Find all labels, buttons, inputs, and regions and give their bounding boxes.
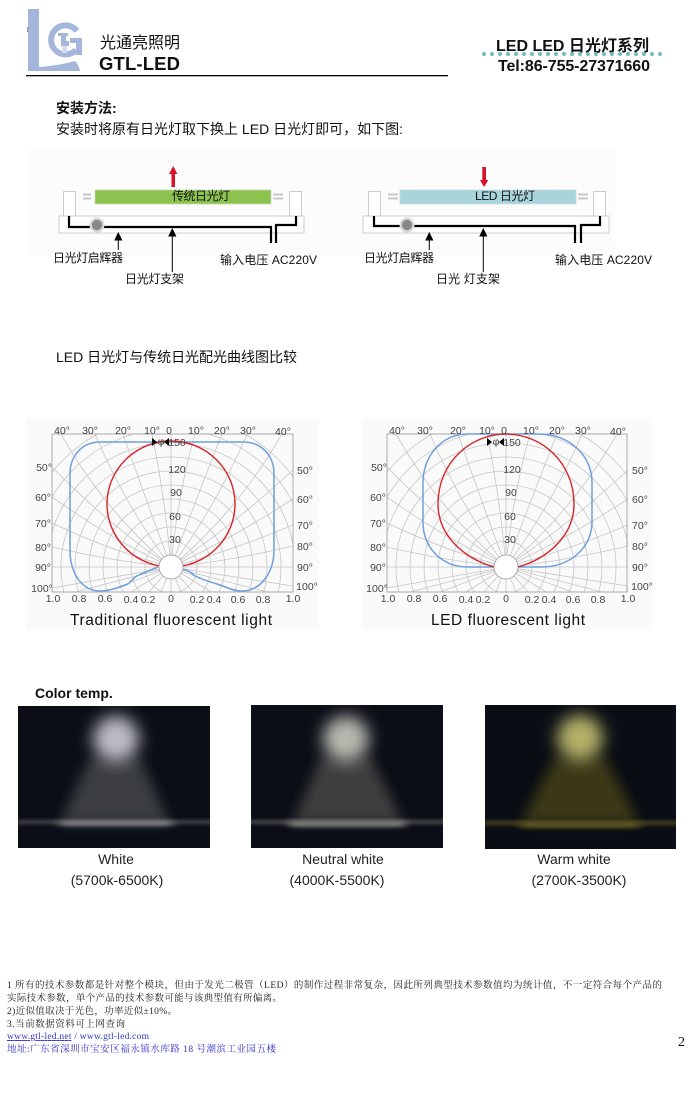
caption: white: [71, 851, 163, 888]
axis labels: 70°: [632, 520, 648, 532]
axis labels: 0: [503, 593, 509, 605]
note 1: 1 所有的技术参数都是针对整个模块，但由于发光二极管（LED）的制作过程非常复杂，因此所列典型技术参数值均为统计值，不一定符合每个产品的: [7, 979, 662, 991]
axis labels: 30: [504, 534, 516, 546]
axis labels: 80°: [370, 542, 386, 554]
axis labels: 80°: [35, 542, 51, 554]
section heading: light distribution comparison: LED 日光灯与传统日光配光曲线图比较: [56, 349, 297, 365]
axis labels: 10°: [523, 425, 539, 437]
axis labels: 90°: [35, 562, 51, 574]
axis labels: 30°: [417, 425, 433, 437]
diagram: traditional lamp: [53, 166, 317, 286]
axis labels: 50°: [297, 465, 313, 477]
caption: warm white: Warm white: [537, 851, 611, 867]
axis labels: 150: [168, 437, 186, 449]
axis labels: 90°: [297, 562, 313, 574]
company name: 光通亮照明: [100, 34, 180, 52]
label: starter: 日光灯启辉器: [364, 251, 434, 265]
axis labels: 10°: [479, 425, 495, 437]
axis labels: 30°: [82, 425, 98, 437]
label: starter: 日光灯启辉器: [53, 251, 123, 265]
caption: neutral white: (4000K-5500K): [290, 872, 384, 888]
axis labels: 0: [501, 425, 507, 437]
heading: 安装方法:: [56, 100, 117, 116]
photo: neutral white: [241, 705, 453, 848]
blue curve: [423, 434, 592, 567]
axis labels: 50°: [632, 465, 648, 477]
axis labels: 100°: [296, 581, 318, 593]
label: input voltage: 输入电压 AC220V: [555, 252, 652, 267]
polar chart: [19, 415, 323, 719]
axis labels: 20°: [450, 425, 466, 437]
axis labels: 150: [503, 437, 521, 449]
chart title: LED fluorescent light: [431, 612, 586, 629]
axis labels: 40°: [275, 426, 291, 438]
instruction: 安装时将原有日光灯取下换上 LED 日光灯即可，如下图:: [56, 121, 403, 137]
axis labels: 70°: [35, 518, 51, 530]
photo: white: [8, 706, 220, 848]
axis labels: 70°: [297, 520, 313, 532]
axis labels: 120: [503, 464, 521, 476]
axis labels: 60: [504, 511, 516, 523]
note 2: 2)近似值取决于光色，功率近似±10%。: [7, 1005, 177, 1017]
note 1 continued: 实际技术参数，单个产品的技术参数可能与该典型值有所偏离。: [7, 992, 282, 1004]
axis labels: 90°: [370, 562, 386, 574]
axis labels: 90°: [632, 562, 648, 574]
panel: LED fluorescent chart: [354, 415, 658, 719]
axis labels: φ: [493, 436, 500, 448]
axis labels: 60°: [632, 494, 648, 506]
axis labels: 0.6: [566, 594, 580, 606]
starter: [90, 218, 104, 232]
axis labels: 100°: [366, 583, 388, 595]
inner circle: [159, 555, 183, 579]
bracket arrow: [480, 229, 487, 272]
red curve: [438, 434, 574, 567]
axis labels: 0.4: [459, 594, 473, 606]
red curve: [107, 441, 235, 567]
axis labels: 0.8: [407, 593, 421, 605]
header: [26, 9, 662, 76]
axis labels: 0.2: [525, 594, 539, 606]
axis labels: 90: [505, 487, 517, 499]
axis labels: 0.6: [98, 593, 112, 605]
tube label: 传统日光灯: [172, 188, 230, 203]
bracket arrow: [169, 229, 176, 272]
label: bracket: 日光 灯支架: [436, 272, 500, 286]
red arrow down: [480, 167, 488, 187]
axis labels: 50°: [371, 462, 387, 474]
axis labels: 0.8: [256, 594, 270, 606]
section heading: color temperature: Color temp.: [35, 685, 113, 701]
brand name: GTL-LED: [99, 53, 180, 74]
axis labels: 0.8: [591, 594, 605, 606]
label: bracket: 日光灯支架: [125, 272, 184, 286]
axis labels: 40°: [389, 425, 405, 437]
logo: [27, 9, 82, 71]
wiring: [69, 216, 296, 243]
axis labels: 100°: [31, 583, 53, 595]
starter arrow: [115, 233, 122, 250]
starter arrow: [426, 233, 433, 250]
tube label: LED 日光灯: [475, 189, 535, 203]
telephone: Tel:86-755-27371660: [498, 58, 650, 75]
axis labels: 1.0: [286, 593, 300, 605]
series title: LED LED 日光灯系列: [496, 36, 649, 55]
axis labels: [31, 425, 318, 606]
axis labels: 0.2: [141, 594, 155, 606]
starter: [400, 218, 414, 232]
blue curve: [70, 442, 274, 591]
chart title: Traditional fluorescent light: [70, 612, 273, 629]
axis labels: 20°: [214, 425, 230, 437]
caption: white: (5700k-6500K): [71, 872, 163, 888]
axis labels: 0: [168, 593, 174, 605]
axis labels: 0.2: [190, 594, 204, 606]
page number: 2: [678, 1035, 685, 1050]
diagram: LED lamp: [363, 167, 652, 286]
photo: warm white: [475, 705, 686, 849]
axis labels: 100°: [631, 581, 653, 593]
axis labels: 60°: [35, 492, 51, 504]
axis labels: 10°: [144, 425, 160, 437]
installation text: [56, 100, 403, 137]
axis labels: 80°: [632, 541, 648, 553]
axis labels: 20°: [115, 425, 131, 437]
axis labels: 60°: [297, 494, 313, 506]
label: input voltage: 输入电压 AC220V: [220, 252, 317, 267]
caption: warm white: (2700K-3500K): [532, 872, 626, 888]
axis labels: 90: [170, 487, 182, 499]
axis labels: 60: [169, 511, 181, 523]
polar chart: [354, 415, 658, 719]
green tube: [95, 190, 271, 204]
wiring: [374, 216, 600, 243]
axis labels: 60°: [370, 492, 386, 504]
axis labels: 30: [169, 534, 181, 546]
header rule: [26, 75, 448, 76]
address: 地址:广东省深圳市宝安区福永镇水库路 18 号潮滨工业园五楼: [7, 1043, 276, 1055]
beam angle marker: [487, 438, 504, 446]
axis labels: 50°: [36, 462, 52, 474]
axis labels: 0.6: [433, 593, 447, 605]
axis labels: 0.4: [124, 594, 138, 606]
axis labels: 120: [168, 464, 186, 476]
axis labels: 40°: [610, 426, 626, 438]
axis labels: 1.0: [621, 593, 635, 605]
axis labels: 0.8: [72, 593, 86, 605]
caption: warm white: [532, 851, 626, 888]
axis labels: 0: [166, 425, 172, 437]
axis labels: φ: [158, 436, 165, 448]
axis labels: 80°: [297, 541, 313, 553]
red arrow up: [169, 166, 177, 187]
axis labels: 0.2: [476, 594, 490, 606]
panel: traditional fluorescent chart: [19, 415, 323, 719]
axis labels: 0.4: [207, 594, 221, 606]
axis labels: 30°: [240, 425, 256, 437]
axis labels: 20°: [549, 425, 565, 437]
note 3: 3.当前数据资料可上网查询: [7, 1018, 125, 1030]
blue tube: [400, 190, 576, 204]
footnotes: [7, 979, 662, 1055]
caption: neutral white: Neutral white: [302, 851, 384, 867]
axis labels: 30°: [575, 425, 591, 437]
axis labels: [366, 425, 653, 606]
inner circle: [494, 555, 518, 579]
axis labels: 70°: [370, 518, 386, 530]
axis labels: 0.6: [231, 594, 245, 606]
dotted divider: [484, 52, 662, 56]
axis labels: 0.4: [542, 594, 556, 606]
axis labels: 1.0: [46, 593, 60, 605]
axis labels: 40°: [54, 425, 70, 437]
caption: neutral white: [290, 851, 384, 888]
axis labels: 10°: [188, 425, 204, 437]
panel: installation diagrams: [28, 148, 652, 286]
caption: white: White: [98, 851, 134, 867]
website links: www.gtl-led.net / www.gtl-led.com: [7, 1032, 150, 1042]
axis labels: 1.0: [381, 593, 395, 605]
beam angle marker: [152, 438, 169, 446]
